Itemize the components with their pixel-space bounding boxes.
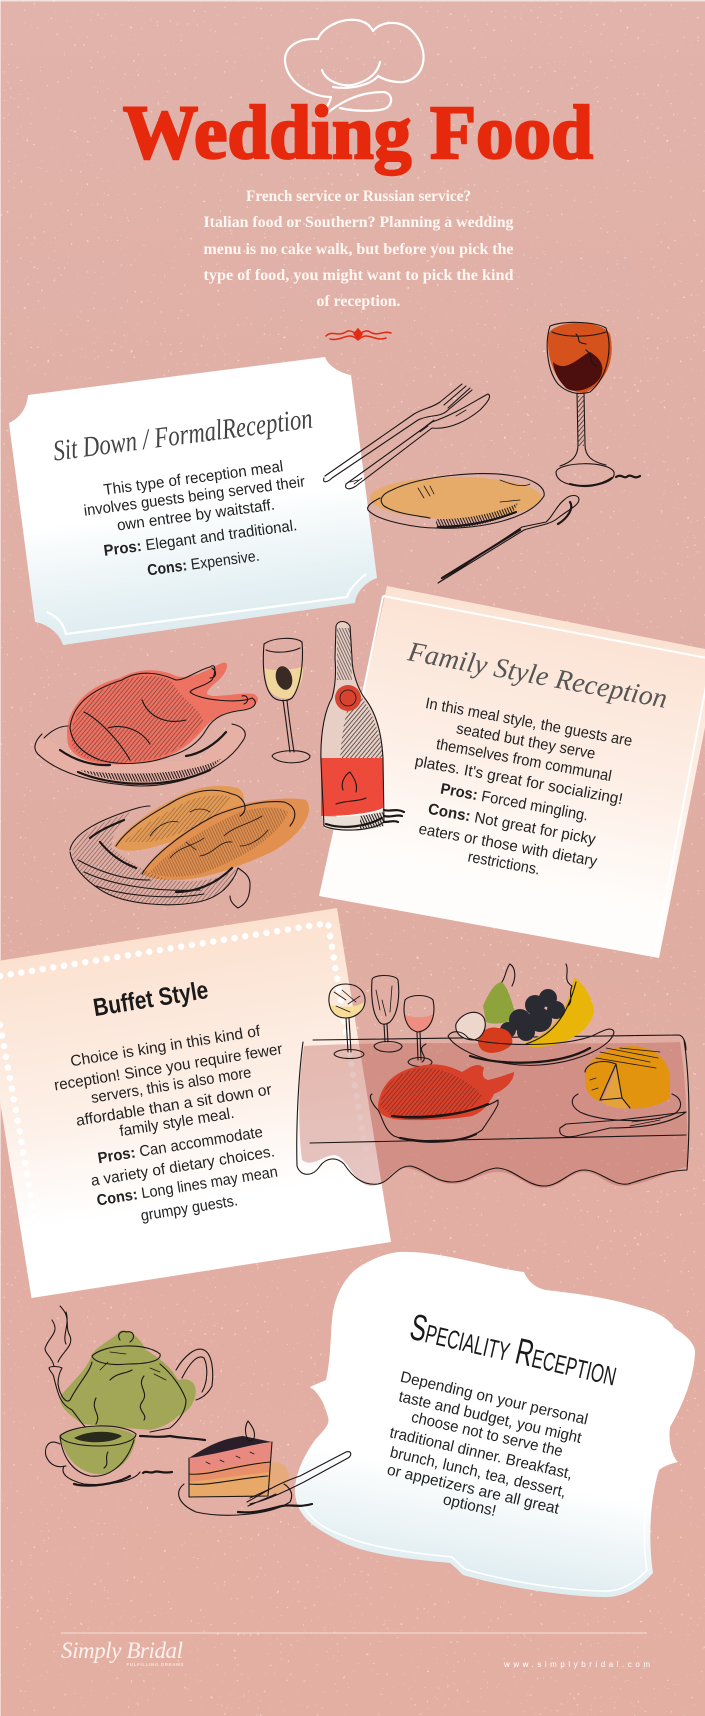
body text (414, 695, 634, 879)
card shape (0, 908, 391, 1298)
dotted border (0, 923, 374, 1235)
intro text: French service or Russian service? (246, 188, 471, 205)
icon: spoon (438, 496, 579, 583)
website url: www.simplybridal.com (503, 1660, 650, 1669)
body text: eaters or those with dietary (417, 821, 599, 870)
icon: teapot (45, 1306, 213, 1486)
body text (83, 458, 306, 579)
card shape (319, 586, 705, 958)
body text: seated but they serve (455, 720, 597, 763)
body text: This type of reception meal (103, 458, 284, 499)
tablecloth (299, 1042, 688, 1188)
body text: Pros: Forced mingling. (439, 781, 590, 825)
panel: family style reception (319, 586, 705, 958)
icon: orange plate (368, 474, 544, 528)
empty flute (372, 976, 402, 1052)
body text: plates. It's great for socializing! (414, 753, 624, 808)
body text: traditional dinner. Breakfast, (388, 1424, 574, 1483)
intro text (204, 188, 514, 310)
panel: speciality reception (295, 1252, 695, 1597)
body text: Depending on your personal (399, 1369, 589, 1428)
body text: choose not to serve the (410, 1409, 564, 1460)
roast turkey (370, 1044, 514, 1142)
intro text: Italian food or Southern? Planning a wedding (204, 214, 514, 231)
body text: Pros: Can accommodate (96, 1124, 264, 1167)
heading: Buffet Style (91, 976, 210, 1022)
icon: cake slice with fork (179, 1421, 351, 1515)
body text: family style meal. (118, 1105, 235, 1140)
rose wine glass (404, 996, 434, 1066)
body text: themselves from communal (435, 736, 613, 785)
fruit bowl (448, 964, 614, 1065)
footer divider (61, 1632, 647, 1634)
body text: a variety of dietary choices. (90, 1143, 276, 1190)
cheese knife (560, 1112, 686, 1137)
panel: buffet style (0, 908, 391, 1298)
body text: In this meal style, the guests are (424, 695, 634, 750)
heading: Sit Down / FormalReception (51, 403, 314, 468)
body text: Cons: Expensive. (146, 548, 261, 579)
icon: fork and knife (324, 384, 490, 489)
card shape (9, 357, 377, 645)
logo: Simply Bridal: Simply Bridal (61, 1638, 183, 1663)
icon: baguettes in basket (70, 786, 309, 908)
logo: Simply Bridal: FULFILLING DREAMS (126, 1662, 184, 1667)
cheese wheel (572, 1046, 681, 1121)
body text: servers, this is also more (90, 1064, 253, 1107)
intro text: menu is no cake walk, but before you pick the (204, 241, 514, 258)
body text: reception! Since you require fewer (53, 1041, 284, 1094)
body text: options! (441, 1491, 498, 1520)
card shape (295, 1252, 695, 1597)
body text: involves guests being served their (83, 473, 306, 520)
steam (45, 1306, 71, 1366)
icon: chef hat (285, 20, 424, 117)
panel: sit down formal reception (9, 357, 377, 645)
body text: grumpy guests. (140, 1192, 239, 1225)
body text: Pros: Elegant and traditional. (103, 517, 298, 560)
flourish divider (326, 329, 391, 340)
body text: affordable than a sit down or (75, 1081, 273, 1130)
body text (53, 1023, 284, 1225)
teacup (60, 1427, 136, 1474)
body text: Choice is king in this kind of (69, 1023, 262, 1070)
illustration: buffet table (297, 964, 689, 1188)
body text: restrictions. (466, 849, 541, 879)
heading: Family Style Reception (404, 636, 670, 715)
body text: taste and budget, you might (397, 1388, 584, 1447)
body text: or appetizers are all great (385, 1462, 561, 1518)
body text: Cons: Long lines may mean (96, 1164, 279, 1210)
icon: champagne bottle (321, 622, 404, 831)
body text: Cons: Not great for picky (427, 801, 597, 848)
white wine glass (329, 984, 365, 1058)
body text: brunch, lunch, tea, dessert, (388, 1444, 568, 1501)
body text: own entree by waitstaff. (116, 497, 276, 534)
icon: roast chicken on platter (35, 663, 258, 786)
intro text: type of food, you might want to pick the kind (204, 267, 514, 284)
intro text: of reception. (316, 293, 401, 310)
icon: champagne glass (263, 638, 310, 763)
title: Wedding Food (123, 91, 593, 175)
body text (385, 1369, 589, 1520)
icon: red wine glass (547, 322, 640, 486)
